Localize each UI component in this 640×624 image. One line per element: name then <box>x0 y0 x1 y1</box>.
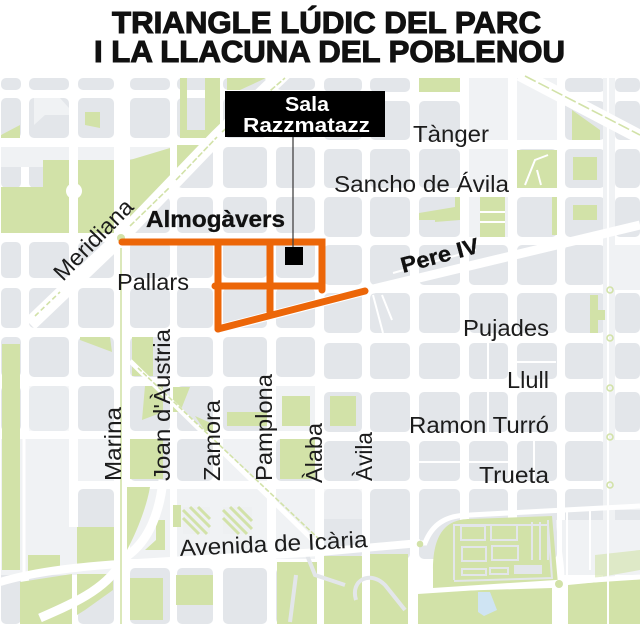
hatched courts <box>183 507 252 534</box>
street labels: Avenida de Icària <box>179 526 368 561</box>
triangle route highlight <box>122 242 365 329</box>
title <box>94 4 565 69</box>
title: I LA LLACUNA DEL POBLENOU <box>94 34 565 69</box>
street labels: Llull <box>507 367 549 393</box>
location marker: Sala Razzmatazz <box>285 247 303 265</box>
street labels: Zamora <box>199 400 225 481</box>
bold street label: Almogàvers: Almogàvers <box>146 206 285 232</box>
title: TRIANGLE LÚDIC DEL PARC <box>112 4 541 40</box>
park interior paths <box>290 520 552 622</box>
pond <box>478 592 497 616</box>
street labels: Pujades <box>463 315 549 341</box>
callout: Sala Razzmatazz: Razzmatazz <box>243 115 370 137</box>
street labels: Tànger <box>413 121 489 147</box>
callout: Sala Razzmatazz: Sala <box>285 94 330 116</box>
street labels: Pamplona <box>251 374 277 481</box>
callout: Sala Razzmatazz <box>225 91 385 137</box>
street labels: Meridiana <box>48 193 139 285</box>
street labels: Trueta <box>479 462 549 488</box>
leader line <box>292 137 294 250</box>
roundabout circle <box>66 183 82 199</box>
street labels: Joan d'Àustria <box>149 329 175 481</box>
street labels: Pallars <box>117 269 189 295</box>
street labels: Marina <box>100 407 126 481</box>
street labels: Àlaba <box>301 423 327 483</box>
street labels: Ramon Turró <box>409 412 549 438</box>
street labels: Àvila <box>351 432 377 481</box>
bold street label: Pere IV: Pere IV <box>398 233 482 278</box>
street labels <box>48 121 549 561</box>
street labels: Sancho de Ávila <box>334 171 509 197</box>
